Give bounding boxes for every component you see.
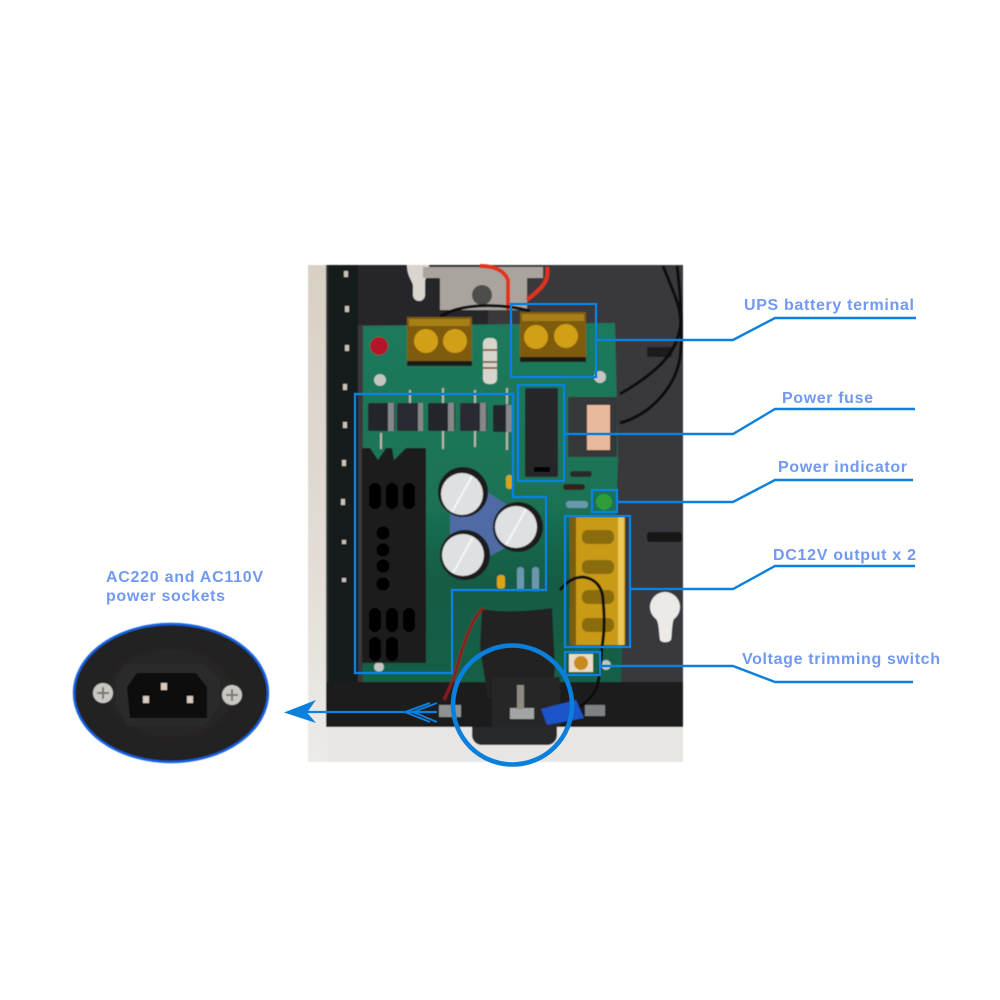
socket close-up xyxy=(74,624,268,762)
socket opening xyxy=(127,673,207,718)
capacitor sleeve xyxy=(463,492,518,555)
left screw xyxy=(93,683,113,703)
heatsink xyxy=(362,448,426,663)
arrow head xyxy=(284,700,316,723)
side grommet xyxy=(647,347,672,357)
circuit board xyxy=(363,323,622,682)
socket faceplate xyxy=(116,664,220,726)
label: Power fuse: Power fuse xyxy=(782,390,873,407)
yellow capacitors xyxy=(497,475,513,589)
leader: power fuse xyxy=(564,409,915,434)
arrow to socket xyxy=(284,700,437,723)
red LED xyxy=(370,337,388,355)
red wire xyxy=(480,266,548,310)
right keyhole xyxy=(650,592,680,642)
transformer red lead xyxy=(444,608,484,700)
label: socket heading: power sockets xyxy=(106,588,225,605)
AC inlet backing xyxy=(492,677,560,727)
frame: trim switch xyxy=(565,652,600,675)
label: socket heading xyxy=(106,569,263,605)
grommet slot xyxy=(647,532,682,542)
leader: battery terminal xyxy=(596,318,916,340)
panel: board photo xyxy=(308,265,683,762)
black lead wire xyxy=(560,577,604,707)
top keyhole xyxy=(407,265,429,301)
frame: indicator xyxy=(592,490,617,512)
socket ellipse xyxy=(74,624,268,762)
leader: DC output xyxy=(630,566,915,589)
frame: battery terminal xyxy=(511,304,596,377)
left terminal block xyxy=(407,317,472,366)
resistor bands xyxy=(483,350,497,368)
right screw xyxy=(222,685,242,705)
label: socket heading: AC220 and AC110V xyxy=(106,569,263,586)
small resistors xyxy=(517,471,592,591)
socket pins xyxy=(143,683,193,703)
label: Power indicator: Power indicator xyxy=(778,459,907,476)
capacitors xyxy=(438,467,543,580)
AC inlet highlight circle xyxy=(453,646,572,764)
transformer block xyxy=(480,608,555,698)
leader: trim switch xyxy=(600,666,913,682)
fuse holder xyxy=(525,388,558,477)
bolt xyxy=(472,285,492,305)
battery terminal block xyxy=(520,312,586,362)
arrow shaft xyxy=(306,711,437,713)
label: DC12V output: DC12V output x 2 xyxy=(773,547,916,564)
black wire xyxy=(440,306,530,317)
relay xyxy=(568,397,617,457)
metal bracket xyxy=(423,267,543,310)
side wires xyxy=(620,266,681,423)
enclosure body xyxy=(326,265,683,727)
callout frames xyxy=(355,304,916,682)
beige wall strip xyxy=(308,265,328,762)
mounting screws xyxy=(374,371,611,672)
enclosure bottom lip xyxy=(326,682,683,727)
frame: fuse xyxy=(518,385,564,481)
nuts and stud xyxy=(439,685,605,719)
label: Voltage trimming switch: Voltage trimming switch xyxy=(742,651,940,668)
blue crimp terminal xyxy=(541,700,584,725)
frame: DC output xyxy=(565,516,630,647)
enclosure left wall xyxy=(328,265,358,705)
AC connector housing xyxy=(472,727,557,745)
power resistor xyxy=(483,338,497,384)
enclosure top dark area xyxy=(358,265,488,325)
label: UPS battery terminal: UPS battery terminal xyxy=(744,297,914,314)
trim potentiometer xyxy=(569,654,593,672)
power indicator LED xyxy=(596,494,612,510)
leader: power indicator xyxy=(617,480,913,502)
frame: rectifier section xyxy=(355,394,546,673)
diodes xyxy=(368,403,513,432)
double chevron xyxy=(405,703,437,722)
left wall teeth xyxy=(341,271,349,582)
diode leads xyxy=(381,388,507,450)
photo backdrop xyxy=(308,265,683,762)
DC output terminal block xyxy=(570,517,625,645)
